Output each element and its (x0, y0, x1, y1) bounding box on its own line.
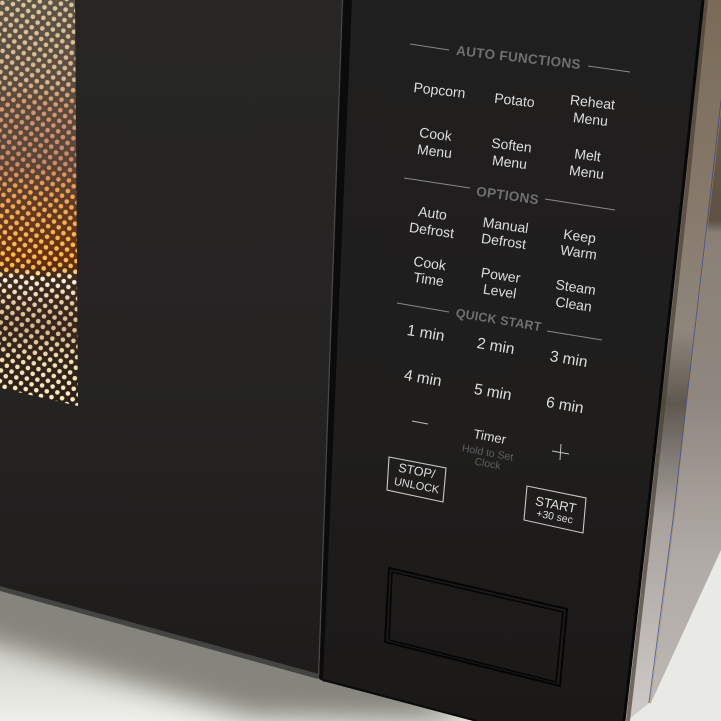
button: start +30 sec: START (534, 493, 578, 516)
button: soften menu: Menu (491, 152, 528, 172)
button: 5 min: 5 min (473, 381, 513, 404)
button: start +30 sec: +30 sec (535, 508, 574, 526)
button: timer: Hold to Set (461, 442, 514, 464)
heading: auto functions (410, 43, 630, 72)
button: cook menu: Cook (418, 124, 454, 144)
button: stop unlock: UNLOCK (393, 476, 441, 496)
button: timer: Timer (472, 426, 508, 447)
button: start +30 sec (524, 486, 586, 533)
heading: options (404, 178, 615, 210)
button: manual defrost: Defrost (480, 230, 527, 252)
door bottom bevel (0, 586, 319, 679)
button: soften menu: Soften (491, 135, 533, 155)
heading: options: OPTIONS (475, 184, 540, 207)
button: potato: Potato (494, 90, 536, 110)
button: 6 min: 6 min (545, 394, 585, 417)
button: stop unlock: STOP/ (397, 461, 437, 482)
door window with perforated mesh (0, 0, 80, 410)
button: cook time: Cook (412, 253, 448, 274)
button: cook menu (416, 124, 454, 161)
panel labels (387, 43, 630, 533)
button: power level: Power (480, 264, 522, 286)
button: manual defrost (480, 214, 530, 252)
button: 2 min: 2 min (476, 335, 516, 358)
button: popcorn: Popcorn (413, 79, 466, 101)
door handle recess / compartment (385, 568, 567, 686)
heading: quick start (397, 303, 602, 340)
button: auto defrost: Defrost (408, 219, 455, 241)
button: cook menu: Menu (416, 141, 453, 161)
button: steam clean: Clean (554, 293, 593, 315)
button: auto defrost: Auto (417, 203, 448, 223)
button: timer: Clock (474, 456, 502, 472)
button: stop unlock (387, 457, 446, 502)
button: reheat menu (569, 92, 616, 129)
button: cook time: Time (412, 269, 445, 289)
button: power level (480, 264, 522, 301)
button: timer (461, 426, 514, 472)
button: cook time (412, 253, 448, 289)
button: power level: Level (482, 281, 517, 301)
button: melt menu (568, 145, 605, 182)
stainless side of the microwave (624, 0, 721, 721)
button: 3 min: 3 min (549, 348, 589, 371)
icon: plus (552, 444, 569, 460)
control panel (323, 0, 703, 721)
button: melt menu: Melt (574, 145, 602, 165)
heading: auto functions: AUTO FUNCTIONS (455, 43, 582, 72)
button: steam clean: Steam (555, 276, 597, 298)
background: counter surface (0, 540, 500, 721)
microwave door (0, 0, 344, 678)
gap between door and panel (318, 0, 353, 682)
button: keep warm (559, 226, 598, 263)
button: 4 min: 4 min (403, 367, 443, 390)
icon: minus (412, 421, 428, 424)
button: manual defrost: Manual (482, 214, 530, 236)
button: keep warm: Warm (559, 242, 598, 263)
button: 1 min: 1 min (406, 322, 446, 345)
button: melt menu: Menu (568, 162, 605, 182)
button: auto defrost (408, 203, 455, 241)
heading: quick start: QUICK START (455, 306, 543, 334)
button: soften menu (491, 135, 533, 172)
button: keep warm: Keep (562, 226, 597, 246)
button: reheat menu: Reheat (569, 92, 616, 113)
button: reheat menu: Menu (572, 109, 609, 129)
button: steam clean (554, 276, 597, 315)
